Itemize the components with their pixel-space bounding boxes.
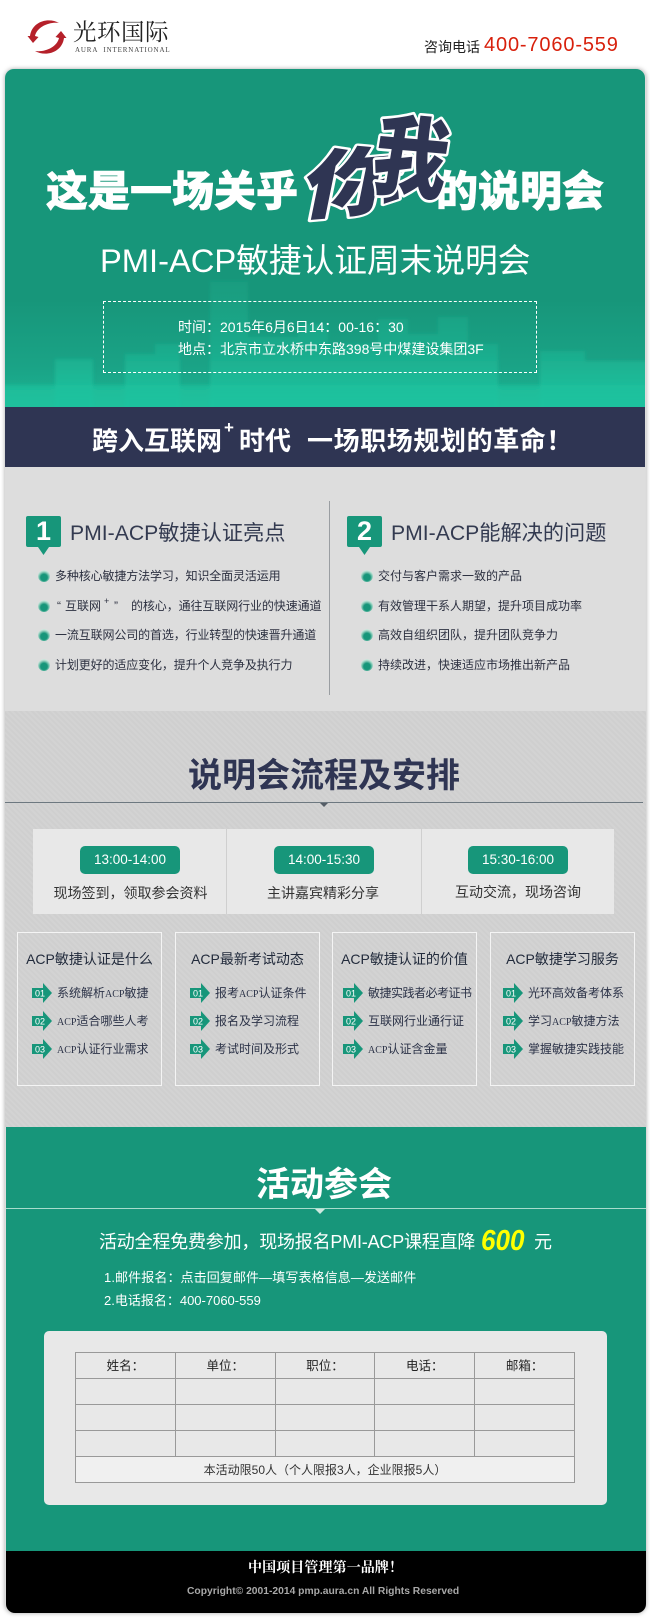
row 1: 光环高效备考体系 (528, 986, 624, 1000)
card title: ACP敏捷学习服务 (506, 951, 619, 967)
topic card 1 (17, 932, 162, 1086)
card title: ACP最新考试动态 (191, 951, 304, 967)
sign-up table: 单位： (206, 1359, 244, 1373)
bullet (361, 629, 373, 641)
sign-up table: 职位： (306, 1359, 344, 1373)
time pill 2 (274, 846, 374, 874)
card title: ACP敏捷认证是什么 (26, 951, 153, 967)
logo (28, 20, 170, 54)
bullet (361, 659, 373, 671)
row 3: 03 (506, 1044, 516, 1054)
list right (361, 569, 582, 672)
topic card 4 (490, 932, 635, 1086)
time pill 1: 13:00-14:00 (94, 852, 166, 867)
sign-up table: 姓名： (107, 1359, 144, 1373)
step email: 1.邮件报名：点击回复邮件—填写表格信息—发送邮件 (104, 1270, 416, 1285)
slot divider (226, 829, 227, 914)
topic card 2 (175, 932, 320, 1086)
banner text B: 时代 (239, 426, 291, 456)
row 3: ACP认证含金量 (368, 1042, 447, 1056)
time pill 2: 14:00-15:30 (288, 852, 360, 867)
logo tagline: AURA INTERNATIONAL (75, 46, 170, 54)
row 2: 02 (35, 1016, 45, 1026)
phone (424, 34, 619, 56)
badge 1: 1 (36, 516, 51, 546)
row 3: 03 (35, 1044, 45, 1054)
item: 计划更好的适应变化，提升个人竞争及执行力 (55, 658, 292, 672)
item: 交付与客户需求一致的产品 (378, 569, 522, 583)
item: 高效自组织团队，提升团队竞争力 (378, 628, 558, 642)
row 1: 01 (506, 988, 516, 998)
bullet (38, 659, 50, 671)
row 1: 报考ACP认证条件 (215, 986, 306, 1000)
row 3: 掌握敏捷实践技能 (528, 1042, 624, 1056)
time pill 3 (468, 846, 568, 874)
list left (38, 569, 321, 672)
row 2: ACP适合哪些人考 (57, 1014, 148, 1028)
panel: hero (5, 69, 645, 407)
row 2 (32, 1011, 148, 1031)
topic card 3 (332, 932, 477, 1086)
sign-up table: 本活动限50人（个人限报3人，企业限报5人） (204, 1463, 446, 1477)
card title: ACP敏捷认证的价值 (341, 951, 468, 967)
caption 2: 主讲嘉宾精彩分享 (267, 885, 379, 901)
item: 多种核心敏捷方法学习，知识全面灵活运用 (55, 569, 281, 583)
title left part: 这是一场关乎 (46, 168, 298, 215)
schedule heading: 说明会流程及安排 (188, 757, 460, 795)
panel: highlights (5, 467, 645, 711)
item: 有效管理干系人期望，提升项目成功率 (378, 599, 582, 613)
row 2: 02 (346, 1016, 356, 1026)
logo name: 光环国际 (73, 20, 169, 46)
caption 1: 现场签到，领取参会资料 (54, 885, 208, 901)
row 3: 03 (346, 1044, 356, 1054)
hero subtitle: PMI-ACP敏捷认证周末说明会 (100, 242, 530, 279)
offer text: 活动全程免费参加，现场报名PMI-ACP课程直降 (99, 1232, 475, 1252)
row 2: 互联网行业通行证 (368, 1014, 464, 1028)
icon: logo ring (28, 20, 66, 54)
copyright: Copyright© 2001-2014 pmp.aura.cn All Rights Reserved (187, 1586, 459, 1597)
timeline panel (33, 829, 614, 914)
panel: schedule (5, 711, 646, 1127)
graffiti: you and me: 我 (365, 85, 460, 218)
column divider (329, 501, 330, 695)
slot divider (421, 829, 422, 914)
heading 1: PMI-ACP敏捷认证亮点 (70, 522, 285, 545)
item: 的核心，通往互联网行业的快速通道 (131, 599, 321, 613)
offer line (99, 1225, 552, 1257)
banner text A: 跨入互联网 (92, 426, 222, 456)
row 3 (32, 1039, 148, 1059)
row 1: 01 (346, 988, 356, 998)
row 3: 考试时间及形式 (215, 1042, 299, 1056)
row 2: 学习ACP敏捷方法 (528, 1014, 619, 1028)
row 1 (32, 983, 148, 1003)
row 3: 03 (193, 1044, 203, 1054)
offer unit: 元 (534, 1232, 552, 1252)
plus mark: + (224, 418, 234, 437)
panel: signup (6, 1127, 646, 1551)
sign-up table: 邮箱： (506, 1359, 543, 1373)
row 1: 系统解析ACP敏捷 (57, 986, 148, 1000)
row 1: 01 (35, 988, 45, 998)
footer (6, 1551, 646, 1613)
item: ” (114, 599, 118, 613)
hero title (46, 85, 604, 236)
row 1 (190, 983, 306, 1003)
item: 持续改进，快速适应市场推出新产品 (378, 658, 570, 672)
row 2 (190, 1011, 299, 1031)
title right part: 的说明会 (436, 168, 604, 215)
skyline (5, 292, 645, 407)
row 3 (190, 1039, 299, 1059)
heading rule (5, 802, 643, 803)
row 2: 报名及学习流程 (215, 1014, 299, 1028)
item (57, 596, 321, 613)
row 1: 敏捷实践者必考证书 (368, 986, 472, 1000)
row 2: 02 (506, 1016, 516, 1026)
row 3 (343, 1039, 447, 1059)
badge 2 (347, 516, 382, 555)
row 1: 01 (193, 988, 203, 998)
heading pointer (320, 803, 328, 807)
event place: 地点：北京市立水桥中东路398号中煤建设集团3F (178, 341, 484, 357)
row 1 (343, 983, 472, 1003)
signup steps (104, 1270, 416, 1308)
bullet (361, 570, 373, 582)
banner (5, 407, 645, 467)
heading pointer (315, 1209, 325, 1214)
row 3: ACP认证行业需求 (57, 1042, 148, 1056)
heading rule (6, 1208, 646, 1209)
phone number: 400-7060-559 (484, 34, 619, 56)
heading 2: PMI-ACP能解决的问题 (391, 522, 606, 545)
caption 3: 互动交流，现场咨询 (455, 884, 581, 900)
bullet (38, 570, 50, 582)
row 3 (503, 1039, 624, 1059)
item: + (104, 596, 109, 606)
sign-up table: 电话： (406, 1359, 444, 1373)
graffiti: you and me: 你 (294, 119, 419, 236)
row 1 (503, 983, 624, 1003)
banner text C: 一场职场规划的革命！ (307, 426, 573, 456)
time pill 3: 15:30-16:00 (482, 852, 554, 867)
graffiti: you and me (294, 85, 460, 236)
badge 2: 2 (357, 516, 372, 546)
event time: 时间：2015年6月6日14：00-16：30 (178, 319, 404, 335)
badge 1 (26, 516, 61, 555)
footer slogan: 中国项目管理第一品牌！ (248, 1561, 403, 1576)
bullet (361, 600, 373, 612)
form panel (44, 1331, 607, 1505)
signup heading: 活动参会 (256, 1166, 392, 1204)
step phone: 2.电话报名：400-7060-559 (104, 1293, 261, 1308)
info box (103, 301, 537, 373)
row 2 (343, 1011, 464, 1031)
item: “ (57, 599, 61, 613)
item: 互联网 (65, 599, 101, 613)
phone label: 咨询电话 (424, 39, 480, 55)
time pill 1 (80, 846, 180, 874)
bullet (38, 629, 50, 641)
item: 一流互联网公司的首选，行业转型的快速晋升通道 (55, 628, 316, 642)
row 2: 02 (193, 1016, 203, 1026)
offer amount: 600 (481, 1225, 525, 1257)
sign-up table (75, 1352, 575, 1483)
row 2 (503, 1011, 619, 1031)
bullet (38, 600, 50, 612)
